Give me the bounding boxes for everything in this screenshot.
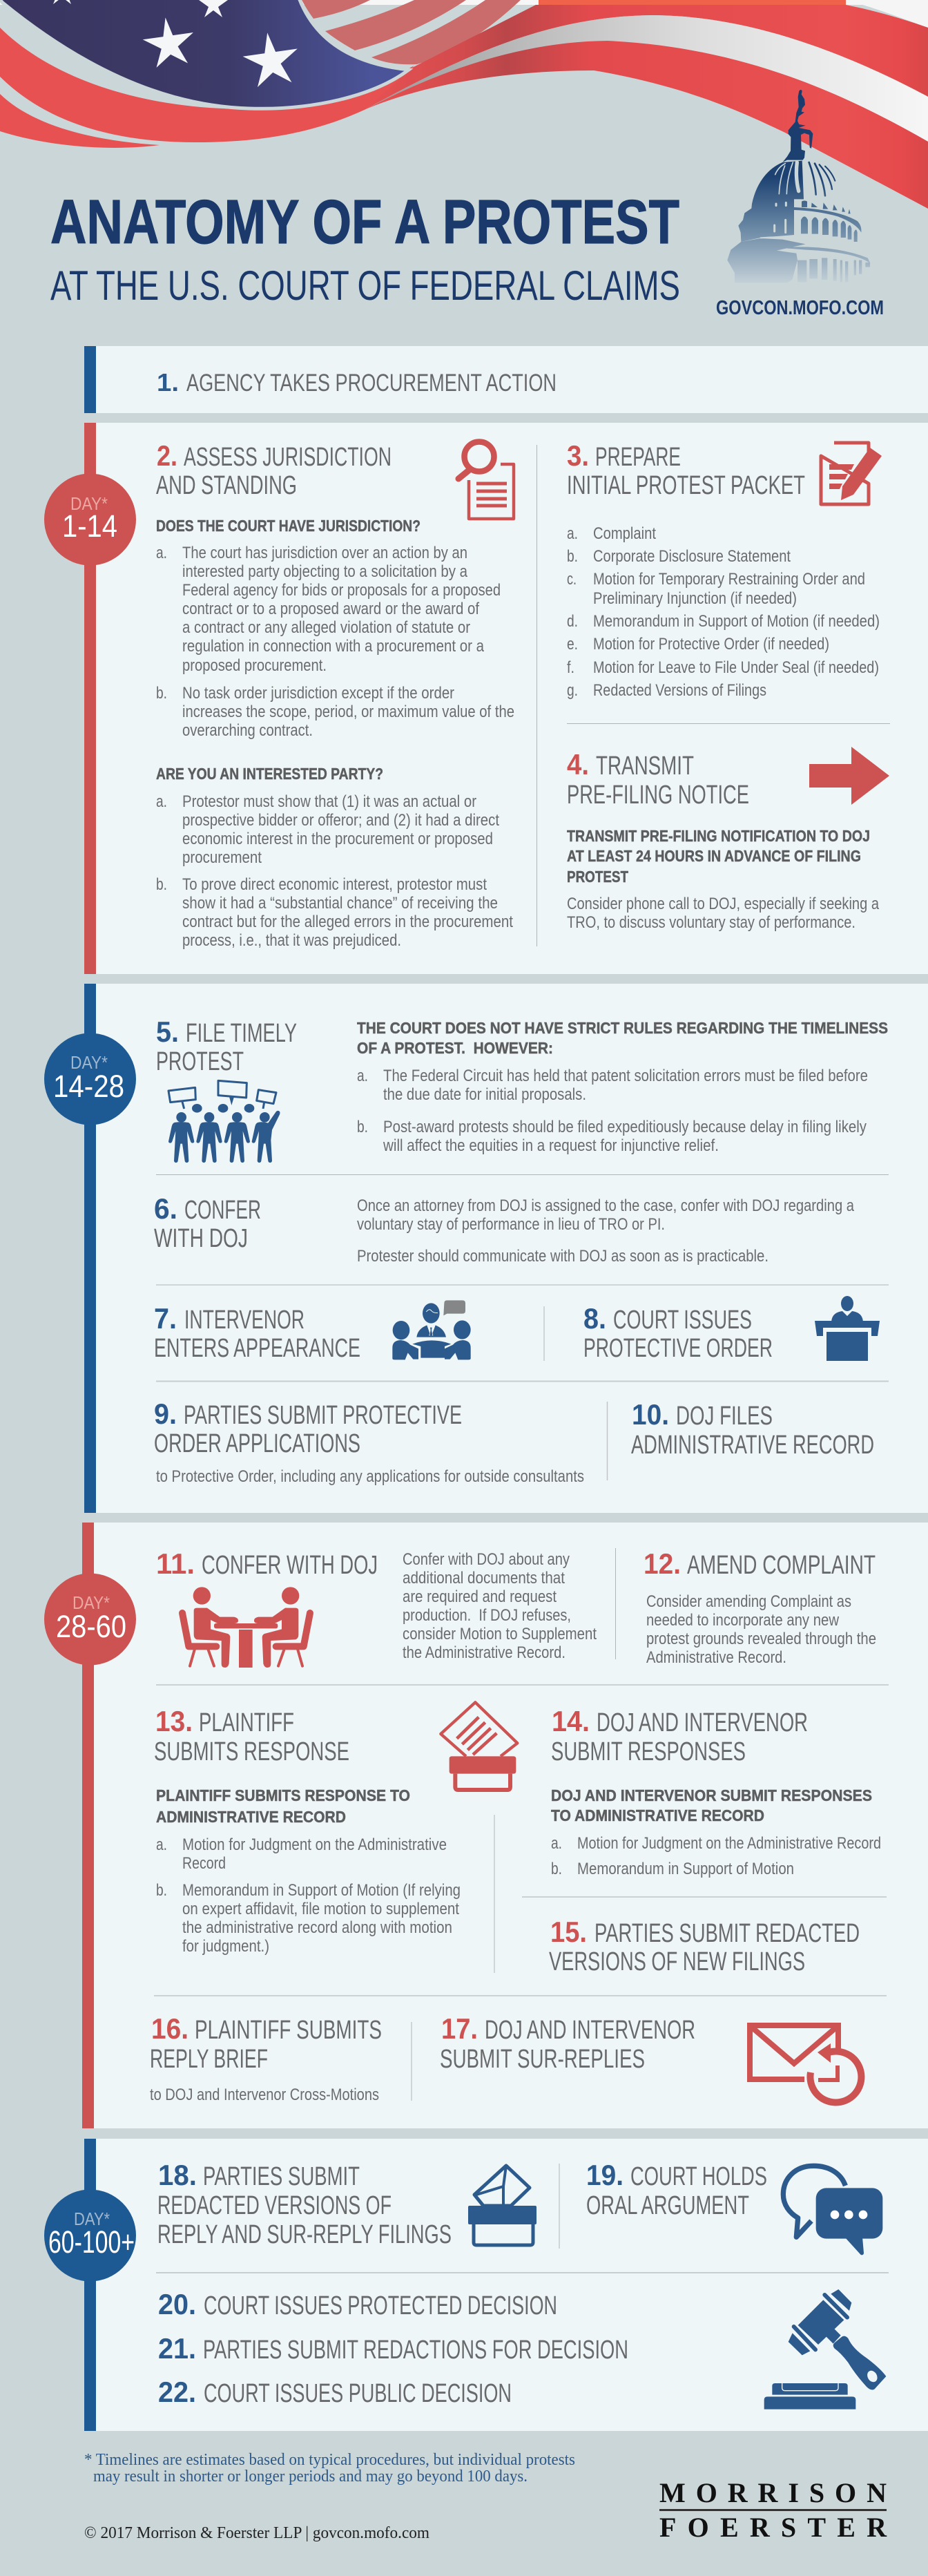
step 6 heading: CONFER [184,1196,261,1225]
step 19 heading: ORAL ARGUMENT [586,2191,749,2220]
step 3 list: c. [567,570,577,589]
step 16 [150,2012,382,2104]
step 22 [158,2376,512,2408]
logo: Morrison Foerster: FOERSTER [659,2512,887,2543]
step 18 heading: PARTIES SUBMIT [203,2162,360,2191]
copyright: © 2017 Morrison & Foerster LLP | govcon.mofo.com [84,2524,429,2542]
website link: GOVCON.MOFO.COM [716,297,884,319]
step 21: 21. [158,2332,196,2365]
step 8 heading: PROTECTIVE ORDER [583,1334,773,1363]
icon: envelope with clock arrow [750,2025,861,2103]
step 14: a. [551,1834,562,1853]
step 11 heading: CONFER WITH DOJ [202,1551,378,1580]
step 20 [158,2288,557,2320]
step 15: 15. [550,1916,587,1948]
step 9: ORDER APPLICATIONS [154,1429,360,1458]
interested party text: procurement [182,848,262,867]
jurisdiction text [156,517,514,740]
step 18 heading: REDACTED VERSIONS OF [157,2191,392,2220]
jurisdiction text: interested party objecting to a solicitation by a [182,562,468,581]
badge: day 28-60 [44,1574,136,1665]
step 3 heading: 3. [567,439,589,472]
step 17: DOJ AND INTERVENOR [485,2016,695,2045]
step 16: REPLY BRIEF [150,2045,268,2074]
step 16: to DOJ and Intervenor Cross-Motions [150,2086,379,2104]
interested party text: To prove direct economic interest, protestor must [182,875,487,894]
step 11 text [403,1550,597,1662]
step 3 list: Motion for Temporary Restraining Order and [593,570,865,589]
step 19 heading: 19. [586,2159,624,2191]
step 3 list: d. [567,612,578,631]
step 20: 20. [158,2288,196,2320]
interested party text: economic interest in the procurement or proposed [182,830,493,848]
step 19 heading [586,2159,767,2220]
step 13 heading: PLAINTIFF [199,1708,294,1737]
step 13 heading: 13. [155,1705,193,1737]
step 3 list: Motion for Leave to File Under Seal (if needed) [593,658,879,677]
step 12: protest grounds revealed through the [646,1630,876,1648]
icon: podium [815,1296,880,1361]
step 19 heading: COURT HOLDS [630,2162,767,2191]
step 3 heading [567,439,805,500]
interested party text [156,765,513,950]
step 12 [644,1547,876,1667]
step 22: COURT ISSUES PUBLIC DECISION [204,2379,512,2408]
jurisdiction text: DOES THE COURT HAVE JURISDICTION? [156,517,420,535]
step 4 text: PROTEST [567,868,629,886]
step 11 text: production. If DOJ refuses, [403,1606,571,1625]
step 3 list: e. [567,635,578,653]
panel: day 60-100+ [44,2139,928,2431]
step 12: Consider amending Complaint as [646,1592,851,1611]
step 16: 16. [151,2012,188,2045]
step 3 list: g. [567,681,578,700]
step 14: Memorandum in Support of Motion [577,1860,794,1878]
step 4 text: AT LEAST 24 HOURS IN ADVANCE OF FILING [567,847,861,865]
subtitle: AT THE U.S. COURT OF FEDERAL CLAIMS [50,263,680,309]
step 11 text: Confer with DOJ about any [403,1550,570,1569]
step 17 [440,2012,695,2074]
badge: day 14-28: 14-28 [53,1069,124,1104]
badge: day 28-60: DAY* [72,1592,110,1613]
step 3 heading: PREPARE [595,443,681,472]
step 14: DOJ AND INTERVENOR SUBMIT RESPONSES [551,1786,872,1804]
icon: magnifier over document [458,442,514,519]
banner: waving flag [0,0,928,209]
jurisdiction text: a contract or any alleged violation of statute or [182,618,470,637]
interested party text: b. [156,875,167,894]
step 10: 10. [632,1398,669,1431]
step 10: DOJ FILES [676,1402,773,1431]
step 13 text: on expert affidavit, file motion to supplement [182,1900,459,1918]
step 15 [549,1916,860,1976]
jurisdiction text: increases the scope, period, or maximum value of the [182,703,514,721]
jurisdiction text: regulation in connection with a procurement or a [182,637,485,656]
step 5 heading [156,1015,297,1076]
step 12: needed to incorporate any new [646,1611,840,1630]
step 3 heading: INITIAL PROTEST PACKET [567,471,805,500]
badge: day 14-28 [44,1033,136,1125]
jurisdiction text: a. [156,544,167,562]
interested party text: show it had a “substantial chance” of receiving the [182,894,498,913]
step 11 text: the Administrative Record. [403,1643,566,1662]
icon: filing box [468,2166,536,2245]
step 9: to Protective Order, including any applications for outside consultants [156,1467,584,1486]
step 3 list: b. [567,547,578,566]
step 3 list: Motion for Protective Order (if needed) [593,635,829,653]
title: ANATOMY OF A PROTEST [50,188,679,257]
step 14: DOJ AND INTERVENOR [597,1708,808,1737]
badge: day 60-100+: 60-100+ [48,2224,135,2260]
step 2 heading: ASSESS JURISDICTION [184,443,392,472]
interested party text: process, i.e., that it was prejudiced. [182,931,401,950]
step 4 heading: PRE-FILING NOTICE [567,781,749,810]
panel: step 1: 1. [157,368,179,397]
panel: day 28-60 [44,1523,928,2128]
step 11 text: are required and request [403,1587,557,1606]
panel: day 1-14 [44,423,928,974]
step 2 heading: AND STANDING [156,471,297,500]
step 5 text: the due date for initial proposals. [383,1085,586,1104]
footnote: may result in shorter or longer periods and may go beyond 100 days. [93,2468,528,2486]
step 20: COURT ISSUES PROTECTED DECISION [204,2291,557,2320]
step 5 heading: PROTEST [156,1047,244,1076]
step 10 [631,1398,874,1460]
interested party text: Protestor must show that (1) it was an actual or [182,792,476,811]
interested party text: contract but for the alleged errors in the procurement [182,913,513,931]
step 13 text: the administrative record along with motion [182,1918,452,1937]
step 21: PARTIES SUBMIT REDACTIONS FOR DECISION [203,2336,628,2365]
panel: day 14-28 [44,984,928,1513]
step 5 text [357,1019,888,1155]
step 17: SUBMIT SUR-REPLIES [440,2045,645,2074]
step 13 heading: SUBMITS RESPONSE [154,1737,349,1766]
step 13 heading [154,1705,349,1766]
step 7 heading: 7. [154,1302,177,1335]
step 13 text: b. [156,1881,167,1900]
badge: day 1-14: 1-14 [62,508,117,544]
step 13 text: ADMINISTRATIVE RECORD [156,1808,346,1826]
step 4 text: TRO, to discuss voluntary stay of performance. [567,913,856,932]
step 13 text: Motion for Judgment on the Administrative [182,1835,447,1854]
step 5 text: b. [357,1118,368,1136]
icon: gavel [764,2289,886,2410]
jurisdiction text: No task order jurisdiction except if the order [182,684,454,703]
jurisdiction text: overarching contract. [182,721,313,740]
icon: two people at table [182,1587,310,1668]
step 5 text: a. [357,1067,368,1085]
icon: meeting [392,1300,471,1359]
step 7 heading: ENTERS APPEARANCE [154,1334,360,1363]
jurisdiction text: Federal agency for bids or proposals for a proposed [182,581,501,600]
jurisdiction text: b. [156,684,167,703]
step 4 heading [567,748,749,810]
badge: day 14-28: DAY* [70,1052,108,1073]
step 18 heading: REPLY AND SUR-REPLY FILINGS [157,2220,452,2249]
step 3 list: Redacted Versions of Filings [593,681,766,700]
step 2 heading: 2. [157,439,177,472]
step 11 text: consider Motion to Supplement [403,1625,597,1643]
step 3 list [567,524,880,700]
badge: day 1-14: DAY* [70,493,108,514]
step 15: VERSIONS OF NEW FILINGS [549,1947,805,1976]
step 17: 17. [441,2012,478,2045]
step 6 text [357,1196,855,1266]
icon: protest crowd [168,1080,280,1163]
step 2 heading [156,439,392,500]
step 9: PARTIES SUBMIT PROTECTIVE [184,1401,462,1430]
step 12: Administrative Record. [646,1648,786,1667]
badge: day 60-100+: DAY* [74,2208,110,2229]
logo: Morrison Foerster: MORRISON [659,2477,887,2508]
step 16: PLAINTIFF SUBMITS [195,2016,382,2045]
badge: day 28-60: 28-60 [56,1609,126,1644]
interested party text: prospective bidder or offeror; and (2) it had a direct [182,811,499,830]
icon: filing box [441,1702,517,1790]
step 14: TO ADMINISTRATIVE RECORD [551,1806,764,1824]
step 8 heading: COURT ISSUES [613,1306,752,1335]
interested party text: ARE YOU AN INTERESTED PARTY? [156,765,383,783]
panel: step 1 [84,346,928,413]
step 3 list: Corporate Disclosure Statement [593,547,791,566]
step 8 heading [583,1302,773,1363]
step 9: 9. [154,1397,177,1430]
step 8 heading: 8. [583,1302,606,1335]
icon: speech bubbles [783,2166,882,2255]
step 5 text: will affect the equities in a request for injunctive relief. [383,1136,719,1155]
jurisdiction text: contract or to a proposed award or the award of [182,600,479,618]
step 9 [154,1397,584,1486]
step 11 heading: 11. [156,1547,195,1580]
step 3 list: Memorandum in Support of Motion (if needed) [593,612,880,631]
step 4 heading: 4. [567,748,589,781]
step 5 heading: 5. [156,1015,179,1048]
step 4 heading: TRANSMIT [596,752,694,781]
step 3 list: a. [567,524,578,543]
step 12: 12. [644,1547,681,1580]
step 3 list: Complaint [593,524,656,543]
badge: day 60-100+ [44,2190,136,2281]
logo: Morrison Foerster [659,2477,887,2543]
step 18 heading [157,2159,452,2249]
step 3 list: f. [567,658,574,677]
step 4 text: TRANSMIT PRE-FILING NOTIFICATION TO DOJ [567,827,870,845]
step 14: SUBMIT RESPONSES [551,1737,746,1766]
step 14 [551,1705,881,1878]
step 14: 14. [552,1705,590,1737]
step 7 heading [154,1302,360,1363]
step 13 text: a. [156,1835,167,1854]
jurisdiction text: proposed procurement. [182,656,327,675]
step 21 [158,2332,628,2365]
step 5 text: OF A PROTEST. HOWEVER: [357,1039,553,1057]
icon: capitol dome [727,90,871,283]
step 7 heading: INTERVENOR [184,1306,304,1335]
step 14: b. [551,1860,562,1878]
step 13 text [156,1786,461,1956]
footnote: * Timelines are estimates based on typical procedures, but individual protests [84,2451,575,2469]
step 13 text: for judgment.) [182,1937,269,1956]
step 13 text: PLAINTIFF SUBMITS RESPONSE TO [156,1786,410,1804]
step 6 heading: WITH DOJ [154,1224,248,1253]
step 6 heading [154,1192,261,1253]
step 18 heading: 18. [158,2159,197,2191]
step 13 text: Memorandum in Support of Motion (If relying [182,1881,461,1900]
step 6 text: Protester should communicate with DOJ as soon as is practicable. [357,1247,768,1266]
step 6 heading: 6. [154,1192,177,1225]
step 13 text: Record [182,1854,226,1873]
step 22: 22. [158,2376,196,2408]
icon: document and pencil [821,443,882,504]
panel: step 1: AGENCY TAKES PROCUREMENT ACTION [186,370,557,397]
interested party text: a. [156,792,167,811]
step 5 heading: FILE TIMELY [186,1019,297,1048]
step 4 text [567,827,880,932]
step 11 text: additional documents that [403,1569,565,1587]
badge: day 1-14 [44,474,136,565]
jurisdiction text: The court has jurisdiction over an action by an [182,544,467,562]
footnote [84,2451,575,2486]
step 6 text: voluntary stay of performance in lieu of TRO or PI. [357,1215,665,1234]
icon: arrow [809,747,889,805]
step 3 list: Preliminary Injunction (if needed) [593,589,797,608]
step 11 heading [156,1547,378,1580]
